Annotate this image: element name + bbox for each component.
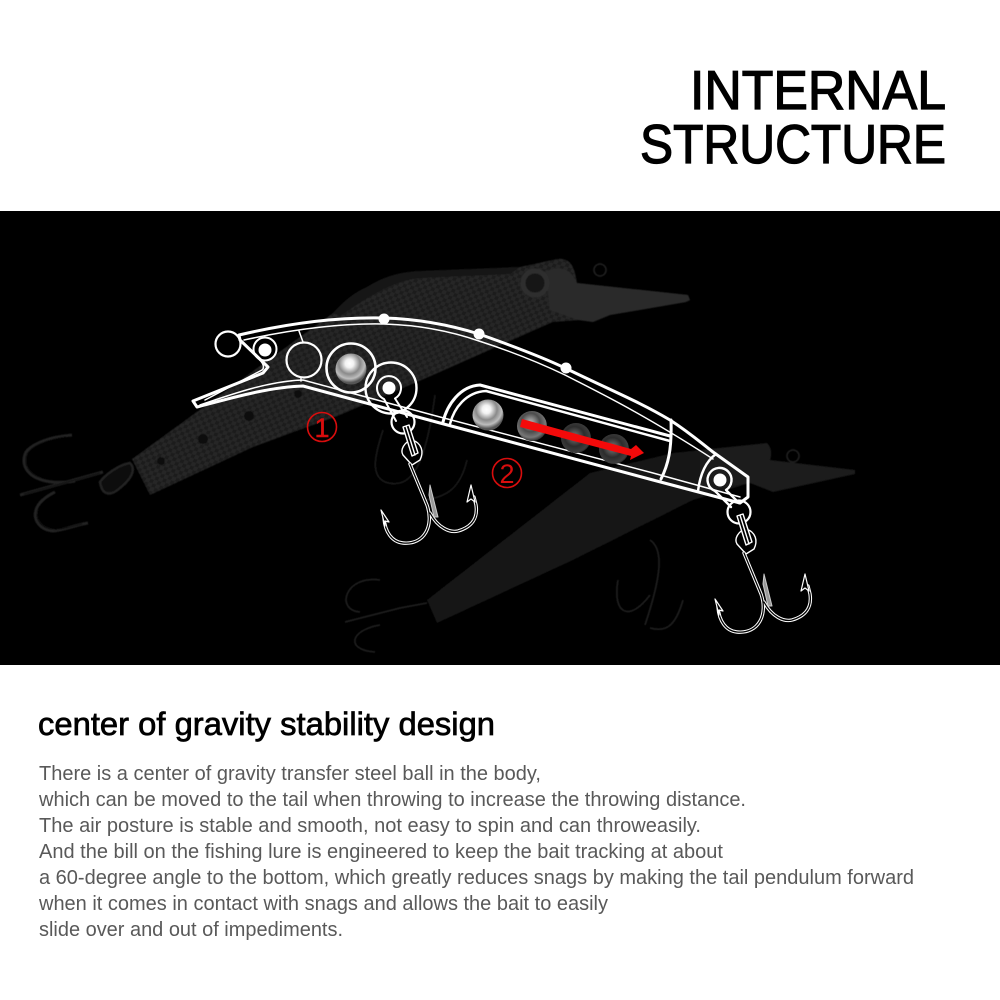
red arrow (520, 419, 644, 460)
marker 1 (308, 412, 336, 443)
rear eyelet (708, 468, 739, 507)
body text: The air posture is stable and smooth, not easy to spin and can throweasily. (39, 815, 701, 837)
front eyelet (377, 376, 407, 421)
body text: slide over and out of impediments. (39, 919, 343, 941)
body text: a 60-degree angle to the bottom, which greatly reduces snags by making the tail pendulum forward (39, 867, 914, 889)
ghost lure: upper left background lure (20, 259, 690, 531)
title (640, 59, 946, 175)
body text (38, 763, 914, 941)
ghost lure: lower right background lure (345, 264, 855, 652)
lure outline (193, 318, 748, 507)
marker 1: 1 (314, 413, 330, 443)
rear chamber (698, 454, 716, 491)
title: INTERNAL (690, 59, 946, 121)
ghost hook: belly treble (375, 395, 467, 500)
panel: dark lure diagram (0, 211, 1000, 665)
subheading: center of gravity stability design (38, 706, 495, 742)
front hook (381, 410, 476, 543)
front ring (216, 332, 240, 356)
ghost hooks: lower lure (345, 264, 799, 652)
lure body inner line (200, 324, 740, 497)
ghost hook: tail treble (20, 435, 133, 531)
steel balls (336, 354, 629, 464)
body text: when it comes in contact with snags and allows the bait to easily (38, 893, 608, 915)
body text: which can be moved to the tail when throwing to increase the throwing distance. (38, 789, 746, 811)
ball chamber (443, 385, 671, 479)
lure body outer outline (193, 318, 748, 503)
marker 2 (492, 458, 522, 489)
marker 2: 2 (499, 459, 515, 489)
rear hook (715, 500, 810, 632)
title: STRUCTURE (640, 113, 946, 175)
white pivot dots (258, 314, 726, 486)
body text: There is a center of gravity transfer steel ball in the body, (39, 763, 541, 785)
body text: And the bill on the fishing lure is engineered to keep the bait tracking at about (39, 841, 723, 863)
